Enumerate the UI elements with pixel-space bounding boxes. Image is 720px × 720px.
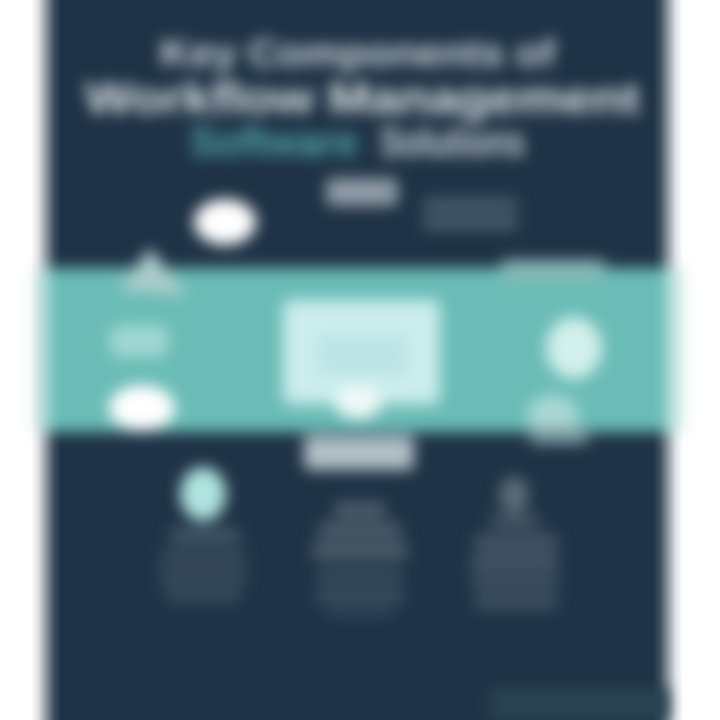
title: Software (190, 118, 358, 165)
monitor stand (334, 385, 382, 419)
title: Key Components of (160, 33, 555, 75)
centre label (304, 436, 414, 470)
monitor screen (318, 335, 408, 375)
left middle icon (110, 325, 168, 357)
left top icon (118, 248, 188, 296)
title: Workflow Management (85, 74, 640, 123)
left lower icon (109, 385, 175, 431)
footer bar (490, 688, 668, 720)
right top label (501, 260, 605, 280)
teal band (47, 268, 668, 432)
right circle icon (546, 317, 602, 379)
column 3 icon (499, 476, 529, 514)
column 1 text (160, 528, 246, 602)
monitor illustration (283, 300, 440, 419)
teal band outer tint (34, 268, 684, 432)
title (85, 33, 640, 165)
column 2 text (312, 502, 408, 617)
title: Solutions (380, 118, 525, 165)
top right text (423, 198, 518, 230)
teal circle icon (180, 467, 226, 521)
right lower icon (527, 395, 588, 444)
column 3 text (471, 515, 559, 610)
top label (326, 178, 398, 206)
cloud icon (194, 199, 256, 245)
